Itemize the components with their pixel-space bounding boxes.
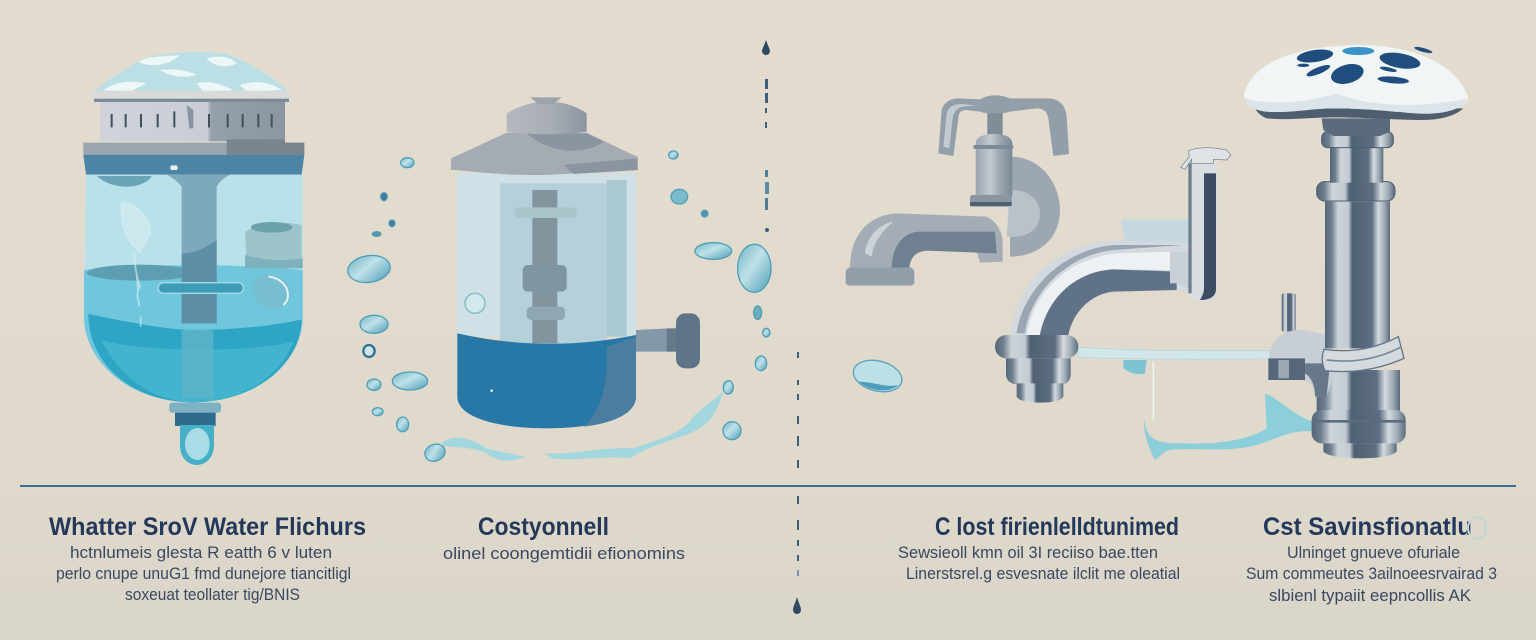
text block: cost: [443, 513, 685, 563]
lid: [451, 97, 638, 175]
tap: [636, 313, 700, 368]
body line: olinel coongemtidii efionomins: [443, 544, 685, 563]
stem and discs: [515, 190, 577, 343]
bubble in water: [248, 269, 296, 314]
spout: [850, 213, 1003, 268]
stem and valve body: [970, 113, 1013, 207]
ring upper: [1322, 132, 1393, 148]
vertical dashed water line: top: [762, 40, 770, 232]
heading: Cst Savinsfionatlu: [1263, 513, 1472, 541]
heading: C lost firienlelldtunimed: [935, 513, 1179, 541]
main pipe: [1325, 202, 1390, 348]
side valve: [1268, 293, 1337, 397]
head connector: [1322, 118, 1390, 136]
water fill: [457, 333, 636, 428]
back plate: [1010, 157, 1060, 257]
ice highlight: [121, 203, 150, 327]
tank body: [84, 175, 303, 402]
water upper: [84, 265, 303, 402]
body line 2: perlo cnupe unuG1 fmd dunejore tiancitligl: [56, 564, 351, 583]
water lower: [88, 314, 302, 402]
bottom splash: [1144, 393, 1313, 460]
outlet: [169, 403, 221, 465]
vertical pipe: [1181, 148, 1231, 302]
divider line: [20, 485, 1516, 487]
cross bar: [158, 283, 243, 293]
slotted collar: [100, 102, 285, 141]
body line 2: Linerstsrel.g esvesnate ilclit me oleatial: [906, 564, 1180, 583]
heading: Whatter SroV Water Flichurs: [49, 513, 366, 541]
cross handle: [938, 95, 1069, 156]
body line 3: slbienl typaiit eepncollis AK: [1269, 586, 1472, 605]
flange: [83, 139, 304, 175]
water droplets: [346, 151, 771, 464]
text block: cost savings: [1246, 513, 1497, 605]
illustration: water dispenser tank: [83, 52, 304, 465]
text block: water fixtures: [49, 513, 366, 604]
central stem: [167, 175, 230, 398]
top shadow: [97, 176, 152, 187]
faucet base: [846, 268, 914, 286]
foam top: [93, 52, 290, 93]
illustration: chrome shower fixture: [1144, 45, 1468, 460]
lower pipe body: [1312, 370, 1406, 458]
shower head dome: [1244, 45, 1468, 114]
illustration: filter jar with tap: [346, 97, 771, 464]
head rim: [1255, 108, 1463, 120]
lid: [92, 91, 291, 103]
inner bubble: [465, 293, 485, 313]
splash: [440, 390, 723, 461]
illustration: chrome faucet: [995, 148, 1270, 420]
ring lower: [1322, 337, 1404, 372]
faint bubble: [1468, 517, 1486, 539]
body line 2: Sum commeutes 3ailnoeesrvairad 3: [1246, 564, 1497, 583]
body line 1: Ulninget gnueve ofuriale: [1287, 543, 1460, 562]
inner panel: [500, 183, 607, 348]
water stream: [1078, 347, 1270, 420]
neck: [1330, 147, 1383, 183]
vertical dashed water line: bottom: [793, 352, 801, 614]
heading: Costyonnell: [478, 513, 609, 541]
chrome nut: [995, 335, 1078, 403]
body line 1: Sewsieoll kmn oil 3I reciiso bae.tten: [898, 543, 1158, 562]
text block: cost friendly: [898, 513, 1180, 583]
small glass: [245, 222, 303, 268]
body line 1: hctnlumeis glesta R eatth 6 v luten: [70, 543, 332, 562]
illustration: matte faucet: [846, 95, 1069, 397]
jar glass: [457, 173, 636, 337]
pale panel: [1121, 219, 1188, 243]
ring middle: [1317, 182, 1395, 201]
body line 3: soxeuat teollater tig/BNIS: [125, 585, 300, 604]
loose droplet: [850, 355, 905, 397]
spray holes: [1296, 46, 1433, 87]
chrome spout: [1010, 241, 1190, 335]
